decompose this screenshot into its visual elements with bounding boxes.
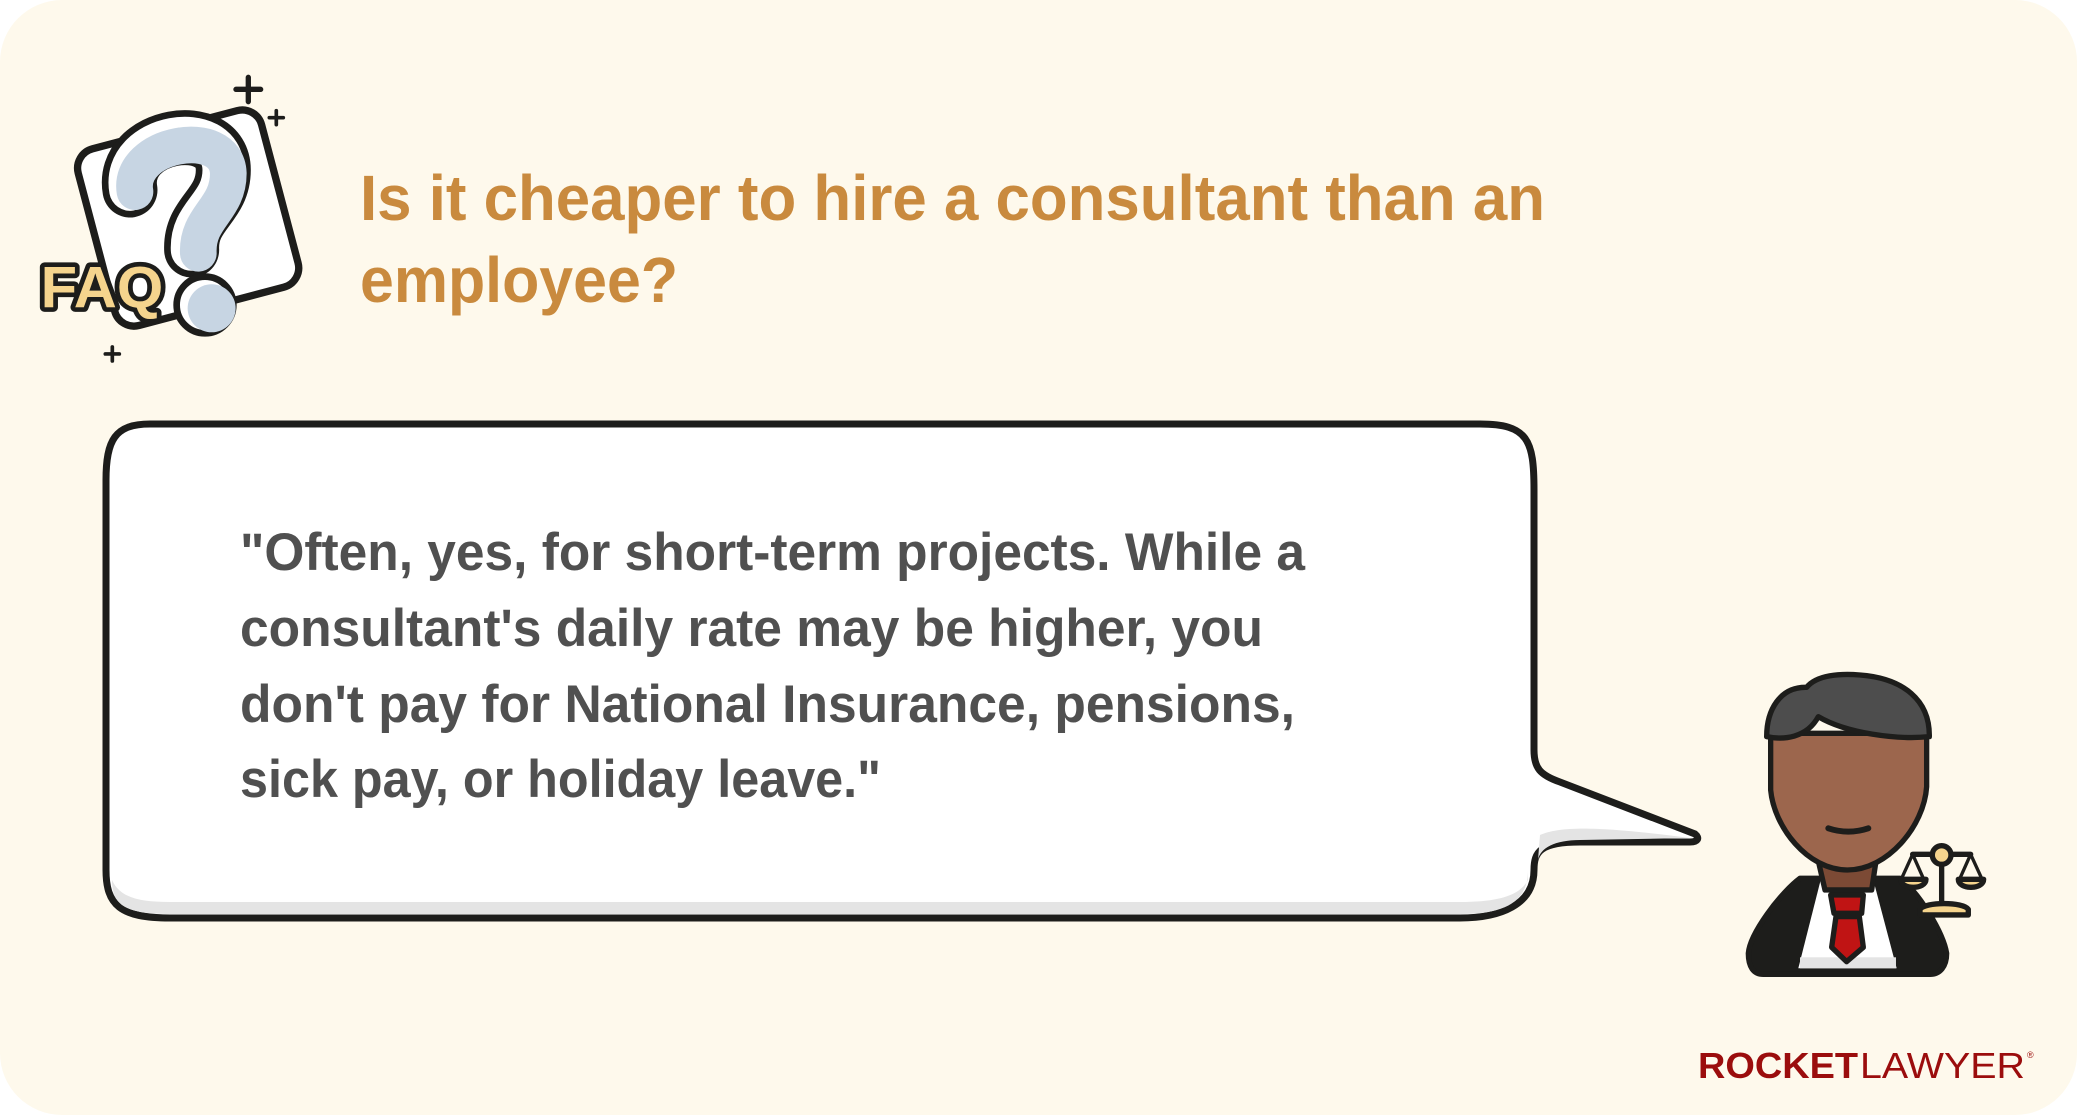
- title: employee?: [360, 244, 678, 316]
- logo: Rocket Lawyer: ROCKET: [1698, 1045, 1858, 1086]
- speech bubble: [106, 424, 1698, 918]
- logo: Rocket Lawyer: LAWYER: [1860, 1045, 2025, 1086]
- logo: Rocket Lawyer: [1698, 1045, 2034, 1086]
- quote text: sick pay, or holiday leave.": [240, 750, 881, 809]
- icon: FAQ question mark: FAQ: [41, 255, 163, 320]
- quote text: consultant's daily rate may be higher, you: [240, 599, 1263, 658]
- title: Is it cheaper to hire a consultant than an: [360, 162, 1545, 234]
- icon: lawyer with scales: [1748, 674, 1984, 974]
- quote text: "Often, yes, for short-term projects. While a: [240, 523, 1305, 582]
- logo: Rocket Lawyer: ®: [2027, 1050, 2034, 1060]
- title: [360, 162, 1545, 316]
- quote text: [240, 523, 1305, 809]
- quote text: don't pay for National Insurance, pensions,: [240, 675, 1295, 734]
- icon: FAQ question mark: [41, 77, 303, 361]
